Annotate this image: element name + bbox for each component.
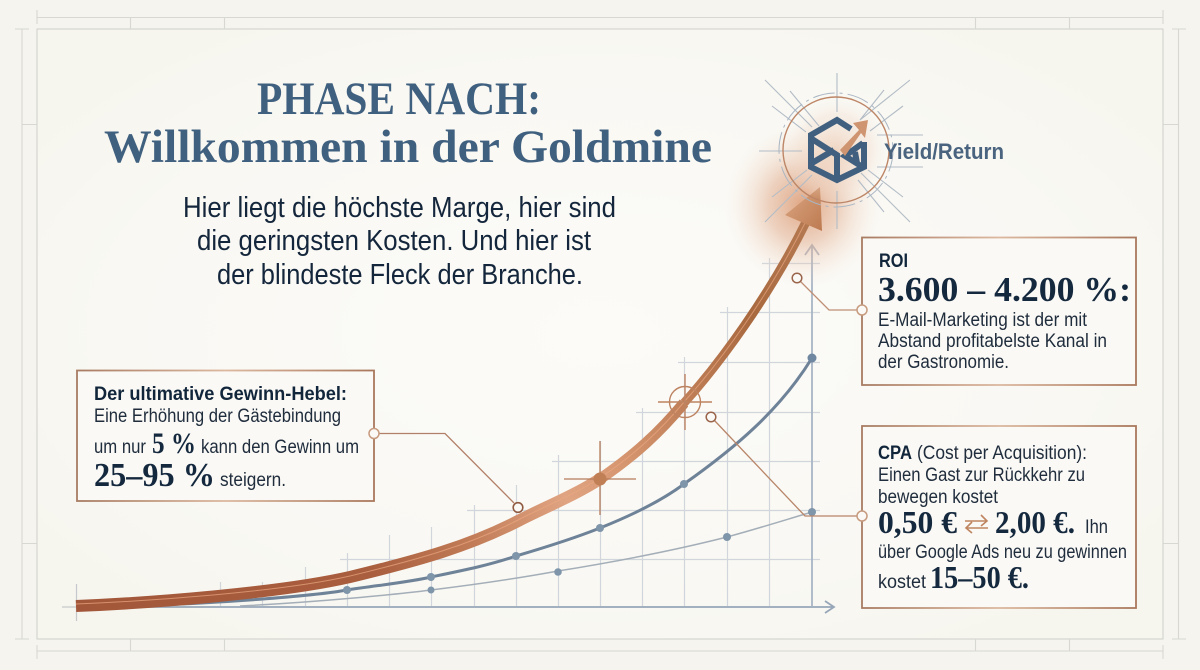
CPA body text: 2,00 €. (995, 504, 1075, 540)
ROI body text: E-Mail-Marketing ist der mit (878, 310, 1088, 331)
panel body text: 5 % (152, 427, 196, 460)
connector: ROI to curve (792, 273, 867, 315)
marker: cross on copper curve (564, 441, 636, 515)
panel: CPA (862, 426, 1136, 608)
subtitle text (183, 192, 616, 291)
icon rays (759, 73, 923, 229)
subtitle text: der blindeste Fleck der Branche. (217, 259, 583, 291)
grey curve (240, 512, 812, 606)
panel: ROI (862, 238, 1136, 385)
chart axes (76, 245, 834, 613)
panel heading: Der ultimative Gewinn-Hebel: (94, 384, 347, 405)
ROI body text: Abstand profitabelste Kanal in (878, 331, 1107, 352)
connector: CPA to curve (706, 412, 867, 521)
panel body text: um nur (94, 437, 147, 458)
chart grid (62, 258, 820, 621)
panel heading: CPA: (Cost per Acquisition): (917, 443, 1087, 464)
CPA body text: 0,50 € (878, 504, 957, 540)
panel body text: Eine Erhöhung der Gästebindung (94, 406, 341, 427)
subtitle text: die geringsten Kosten. Und hier ist (197, 225, 591, 257)
panel: Gewinn-Hebel (77, 370, 374, 501)
copper arrow curve (76, 187, 822, 606)
icon rings (779, 93, 893, 207)
title (104, 73, 712, 173)
connector: Gewinn-Hebel to curve (369, 428, 523, 512)
label: Yield/Return: Yield/Return (884, 139, 1004, 164)
panel heading: ROI: ROI (879, 251, 908, 272)
ROI body text: der Gastronomie. (878, 352, 1009, 373)
title: PHASE NACH: (257, 73, 541, 125)
panel body text: kann den Gewinn um (201, 437, 359, 458)
icon: exchange arrows (965, 515, 988, 533)
blue curve (130, 358, 812, 606)
panel heading: CPA: CPA (878, 443, 912, 464)
marker: target on copper curve (658, 374, 712, 430)
CPA body text: bewegen kostet (878, 487, 999, 508)
panel body text: 25–95 % (94, 457, 215, 494)
icon: yield/return hexagon (759, 73, 923, 229)
subtitle text: Hier liegt die höchste Marge, hier sind (183, 192, 616, 224)
glow behind arrow (725, 123, 881, 287)
ROI figure: 3.600 – 4.200 %: (878, 270, 1131, 309)
panel body text: steigern. (220, 470, 286, 491)
panel body text (94, 406, 359, 494)
CPA body text (878, 465, 1127, 595)
icon: small arrow (840, 120, 868, 156)
CPA body text: Ihn (1085, 517, 1108, 538)
CPA body text: über Google Ads neu zu gewinnen (878, 542, 1127, 563)
CPA body text: kostet (878, 572, 927, 593)
CPA body text: 15–50 €. (930, 559, 1029, 595)
data points (343, 354, 816, 594)
title: Willkommen in der Goldmine (104, 121, 712, 173)
CPA body text: Einen Gast zur Rückkehr zu (878, 465, 1085, 486)
ROI body text (878, 310, 1107, 373)
chart: growth curves on grid (62, 123, 881, 621)
icon: hexagon cube (811, 120, 864, 180)
